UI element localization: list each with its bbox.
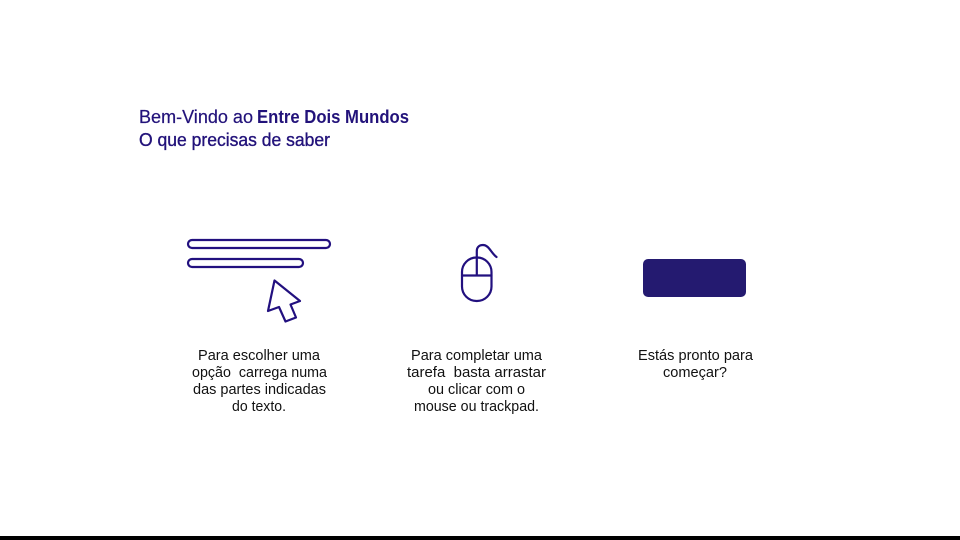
text: choose an option: das partes indicadas — [193, 382, 326, 398]
title — [139, 107, 409, 150]
text: complete a task: ou clicar com o — [428, 382, 525, 398]
text: complete a task: Para completar uma — [411, 348, 543, 364]
title line 1 regular part: Bem-Vindo ao — [139, 107, 253, 127]
text: complete a task: mouse ou trackpad. — [414, 399, 539, 415]
icon: mouse — [462, 245, 496, 301]
bottom black bar — [0, 536, 960, 540]
mouse body — [462, 258, 492, 301]
button: dark start button — [643, 259, 746, 297]
mouse buttons divider — [462, 258, 492, 276]
text: choose an option: Para escolher uma — [198, 348, 321, 364]
mouse cable — [477, 245, 496, 258]
text: ready to start — [638, 348, 754, 381]
text: complete a task — [407, 348, 546, 415]
text: ready to start: Estás pronto para — [638, 348, 754, 364]
title line 2: O que precisas de saber — [139, 130, 330, 150]
text: ready to start: começar? — [663, 365, 727, 381]
first text line outline — [188, 240, 330, 248]
icon: text lines with cursor — [188, 240, 330, 322]
text: complete a task: tarefa basta arrastar — [407, 365, 546, 381]
second text line outline — [188, 259, 303, 267]
text: choose an option: do texto. — [232, 399, 286, 415]
text: choose an option — [192, 348, 328, 415]
title line 1 bold part: Entre Dois Mundos — [257, 107, 409, 127]
text: choose an option: opção carrega numa — [192, 365, 328, 381]
cursor arrow — [268, 280, 300, 322]
